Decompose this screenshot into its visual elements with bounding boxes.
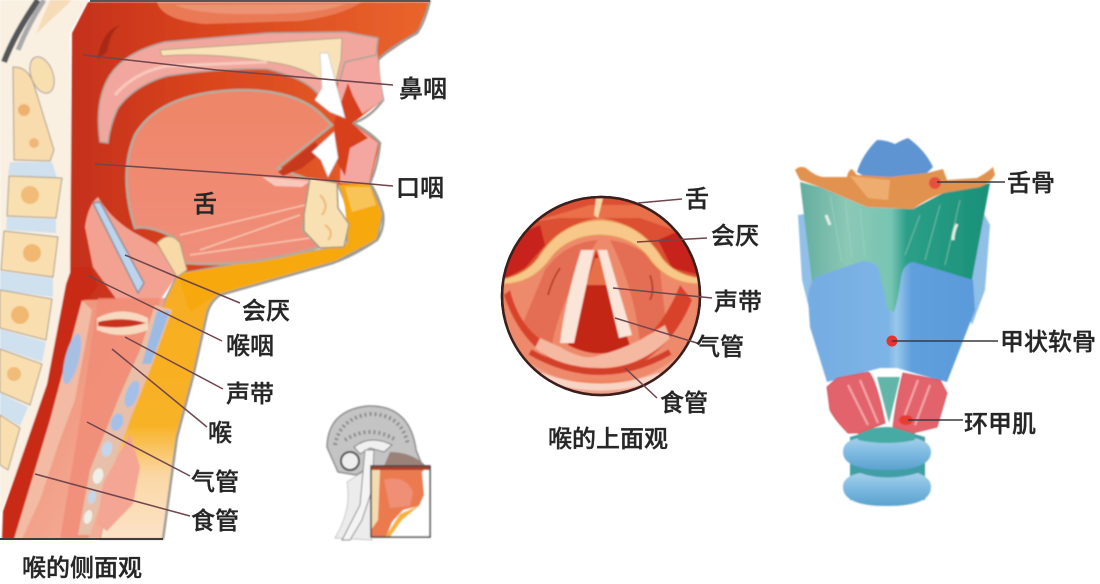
lower arytenoid ring <box>504 285 692 374</box>
label: 鼻咽: 鼻咽 <box>399 76 447 103</box>
bottom tracheal rings <box>843 427 931 506</box>
side horns <box>798 210 990 325</box>
label: 食管: 食管 <box>191 508 239 535</box>
circular laryngoscopic view <box>500 195 702 400</box>
hyoid bone <box>795 167 995 209</box>
glottis <box>568 250 630 354</box>
label: 会厌: 会厌 <box>242 298 290 325</box>
nasal concha <box>157 2 362 24</box>
sagittal section illustration <box>0 0 430 539</box>
mandible bone <box>304 178 349 248</box>
label: 喉咽: 喉咽 <box>226 333 274 360</box>
top edge line <box>90 0 430 2</box>
label: 声带: 声带 <box>714 289 762 316</box>
thyrohyoid membrane <box>800 182 990 330</box>
red markers <box>929 177 941 189</box>
cricothyroid muscles <box>827 372 947 433</box>
epiglottis <box>85 197 178 300</box>
label: 食管: 食管 <box>660 390 708 417</box>
leader lines <box>35 55 393 516</box>
larynx and trachea <box>14 298 172 539</box>
label: 口咽: 口咽 <box>396 175 444 202</box>
panel: anterior larynx cartilage <box>795 138 1096 506</box>
label: 环甲肌: 环甲肌 <box>964 411 1036 438</box>
laryngeal inlet <box>505 235 698 380</box>
soft and hard palate <box>98 32 378 143</box>
icon: small head locator <box>327 406 430 540</box>
caption: superior view: 喉的上面观 <box>548 426 668 453</box>
label: 舌: 舌 <box>193 191 217 218</box>
red dot on thyroid cartilage <box>886 336 898 346</box>
spine column <box>0 0 88 515</box>
label: 舌骨: 舌骨 <box>1007 170 1055 197</box>
bottom edge line <box>0 538 163 540</box>
mouth and teeth <box>312 53 368 177</box>
vocal cords <box>560 250 594 343</box>
leader lines <box>892 182 1005 420</box>
head silhouette <box>70 2 430 320</box>
label: 甲状软骨: 甲状软骨 <box>1000 329 1096 356</box>
pink lips and nose <box>320 34 383 183</box>
label: 会厌: 会厌 <box>711 223 759 250</box>
red pharyngeal wall <box>2 267 98 539</box>
hyoid bone <box>157 236 187 277</box>
leader lines <box>613 199 712 398</box>
thyroid cartilage <box>808 261 975 382</box>
thyroid gland <box>97 434 140 531</box>
larynx illustration <box>795 138 995 506</box>
locator box <box>371 466 430 537</box>
label: 气管: 气管 <box>696 334 744 361</box>
label: 舌: 舌 <box>685 186 709 213</box>
label: 声带: 声带 <box>226 381 274 408</box>
label: 喉: 喉 <box>208 420 232 447</box>
epiglottis <box>857 138 933 180</box>
vocal fold <box>97 312 148 335</box>
panel: lateral view of the larynx <box>0 0 447 582</box>
panel: superior view of the larynx <box>500 186 762 453</box>
tongue <box>126 90 332 264</box>
neck tissue in yellow <box>100 183 383 539</box>
caption: lateral view: 喉的侧面观 <box>22 555 142 582</box>
label: 气管: 气管 <box>191 469 239 496</box>
tongue base <box>508 198 697 278</box>
epiglottis arch <box>503 220 700 284</box>
